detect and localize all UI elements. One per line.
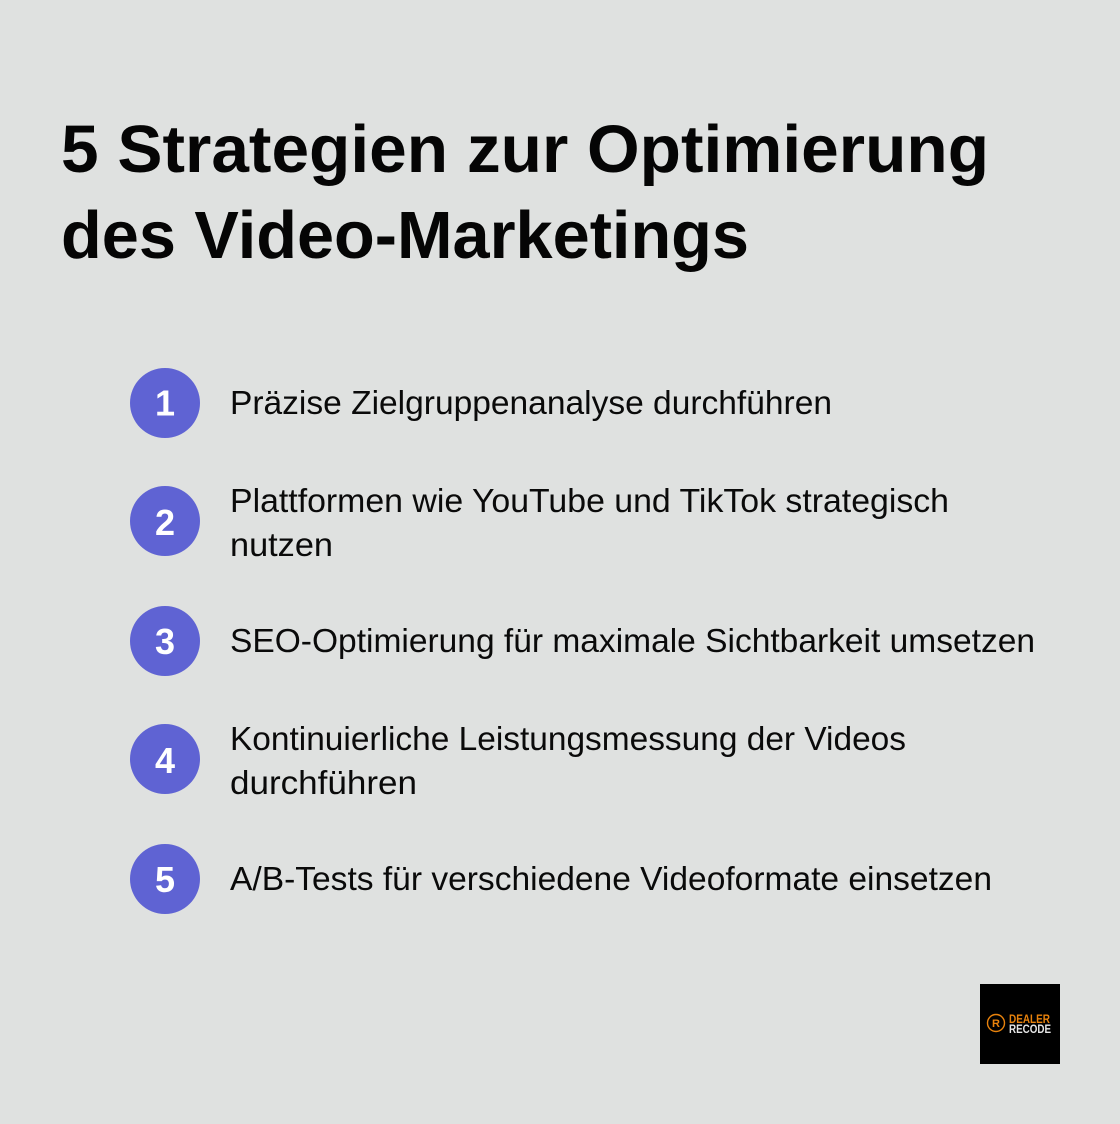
- number badge 4: [130, 724, 200, 794]
- logo: Dealer Recode: [980, 984, 1060, 1064]
- logo: Dealer Recode: R: [992, 1018, 1000, 1030]
- logo: Dealer Recode: DEALER: [1009, 1014, 1051, 1026]
- item 5 text: A/B-Tests für verschiedene Videoformate einsetzen: [230, 861, 992, 898]
- item 1 text: Präzise Zielgruppenanalyse durchführen: [230, 385, 832, 422]
- list item 1: [130, 368, 832, 438]
- list item 3: [130, 606, 1035, 676]
- title: [61, 113, 989, 273]
- number badge 1: 1: [155, 382, 175, 424]
- title: des Video-Marketings: [61, 199, 749, 273]
- number badge 5: 5: [155, 859, 175, 900]
- number badge 2: [130, 486, 200, 556]
- item 2 text: [230, 483, 949, 564]
- item 2 text: Plattformen wie YouTube und TikTok strategisch: [230, 483, 949, 520]
- item 3 text: SEO-Optimierung für maximale Sichtbarkeit umsetzen: [230, 623, 1035, 660]
- number badge 2: 2: [155, 502, 175, 543]
- item 4 text: durchführen: [230, 765, 417, 802]
- logo: Dealer Recode: RECODE: [1009, 1024, 1051, 1036]
- item 4 text: [230, 721, 906, 802]
- item 4 text: Kontinuierliche Leistungsmessung der Videos: [230, 721, 906, 758]
- list item 5: [130, 844, 992, 914]
- list item 4: [130, 721, 906, 802]
- number badge 4: 4: [155, 740, 175, 781]
- list item 2: [130, 483, 949, 564]
- number badge 3: 3: [155, 621, 175, 662]
- number badge 1: [130, 368, 200, 438]
- number badge 5: [130, 844, 200, 914]
- number badge 3: [130, 606, 200, 676]
- item 2 text: nutzen: [230, 527, 333, 564]
- title: 5 Strategien zur Optimierung: [61, 113, 989, 187]
